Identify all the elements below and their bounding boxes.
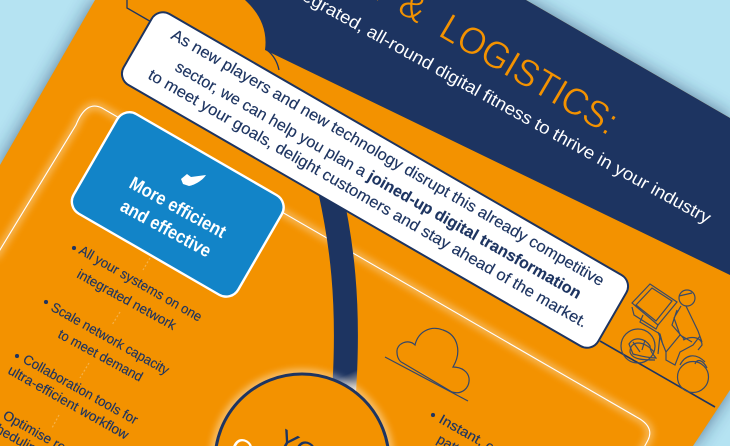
efficiency bullet list: Scale network capacity [49, 300, 172, 378]
title: LOGISTICS: [432, 7, 625, 144]
card: more efficient and effective: More efficient [126, 172, 230, 242]
connector line [330, 190, 346, 392]
circle glow [214, 373, 390, 446]
card: more efficient and effective [67, 107, 289, 302]
icon: delivery rider [600, 284, 715, 407]
dotted connectors [52, 258, 150, 428]
efficiency bullet list: integrated network [75, 266, 179, 333]
panel outline glow [0, 106, 650, 446]
efficiency bullet list [0, 243, 205, 446]
efficiency bullet list: ultra-efficient workflow [6, 363, 132, 442]
central circle [215, 374, 389, 446]
efficiency bullet list: All your systems on one [77, 243, 205, 324]
header band [245, 0, 730, 275]
intro card: sector, we can help you plan a joined-up digital transformation [172, 59, 584, 303]
card: more efficient and effective: and effective [117, 195, 215, 261]
circle label [225, 423, 425, 446]
intro card: As new players and new technology disrupt this already competitive [168, 27, 607, 290]
title [221, 0, 625, 144]
efficiency bullet list: Collaboration tools for [21, 352, 141, 428]
intro card [117, 7, 633, 353]
icon: cloud [385, 328, 469, 401]
efficiency bullet list: to meet demand [56, 326, 145, 384]
intro card: to meet your goals, delight customers and stay ahead of the market. [145, 67, 590, 331]
icon: tick [181, 174, 206, 186]
panel outline [0, 106, 650, 446]
header fold and outline [127, 0, 279, 70]
